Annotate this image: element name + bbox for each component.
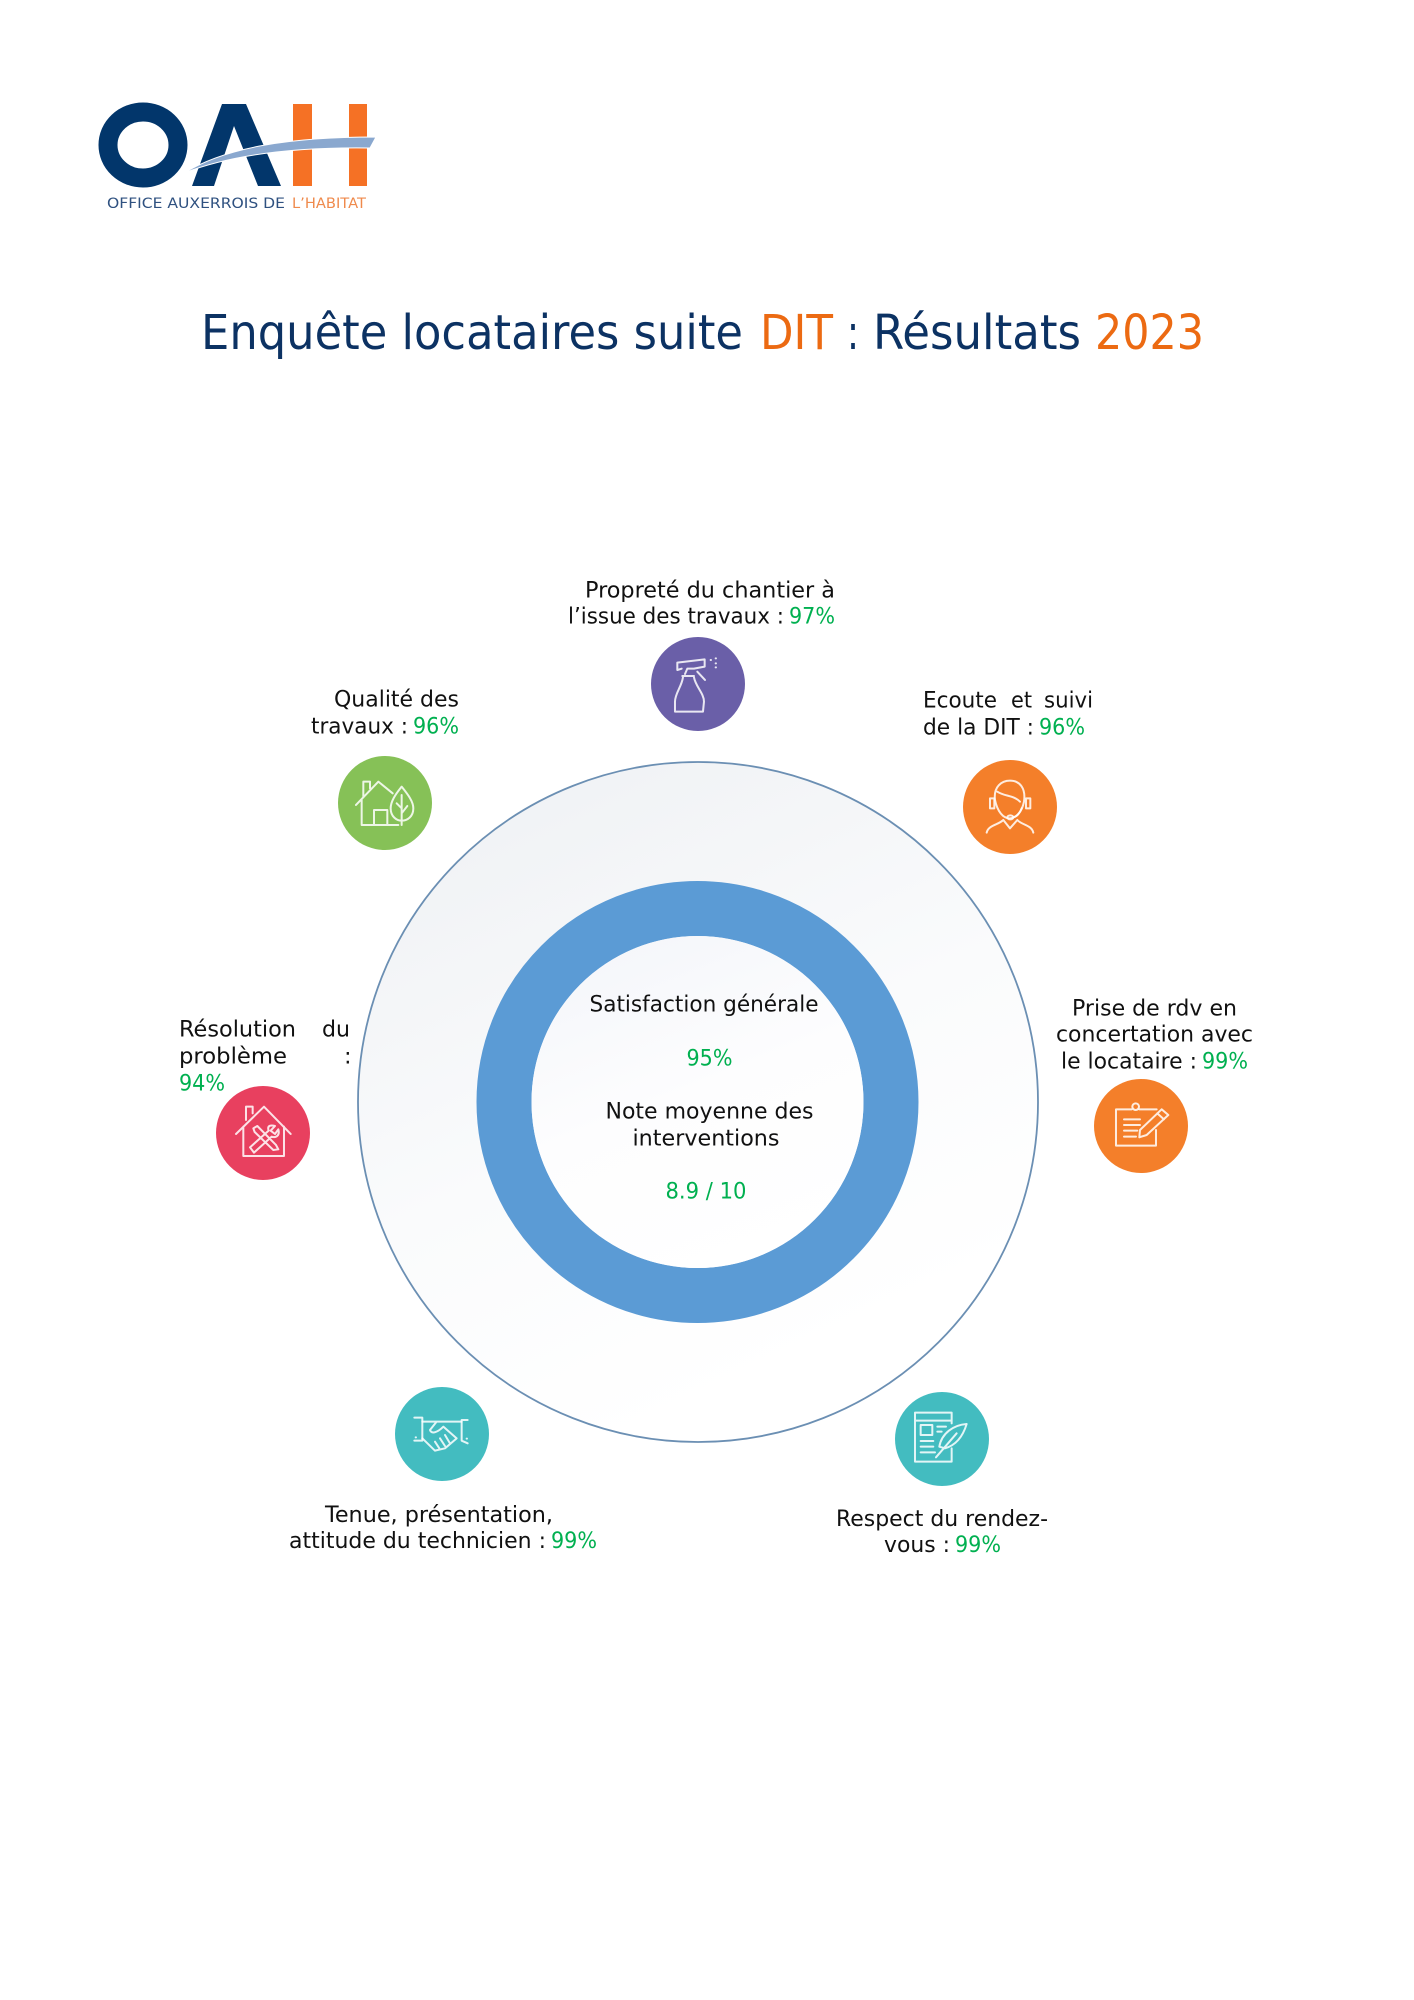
outer circle	[358, 762, 1038, 1442]
centre text: satisfaction and note: 8.9 / 10	[666, 1178, 746, 1204]
label: prise de rdv: concertation avec	[1056, 1022, 1253, 1048]
centre text: satisfaction and note: Note moyenne des	[606, 1098, 814, 1124]
title	[201, 305, 1204, 361]
label: qualité: Qualité des	[334, 686, 459, 712]
label: écoute: 96%	[1039, 714, 1085, 740]
icon: note and pencil	[1094, 1079, 1188, 1173]
title: :	[847, 305, 859, 361]
label: propreté: Propreté du chantier à	[585, 578, 835, 604]
logo tagline	[107, 196, 366, 212]
logo letter A	[192, 104, 281, 186]
title: Enquête locataires suite	[201, 305, 743, 361]
icon: spray bottle	[651, 637, 745, 731]
title: DIT	[760, 305, 834, 361]
label: résolution: Résolution	[179, 1016, 296, 1042]
label: respect: 99%	[955, 1532, 1001, 1558]
title: Résultats	[873, 305, 1081, 361]
label: propreté	[568, 578, 835, 630]
label: résolution: 94%	[179, 1070, 225, 1096]
label: qualité	[311, 686, 459, 740]
logo swoosh	[184, 137, 376, 173]
logo tagline: OFFICE AUXERROIS DE	[107, 196, 285, 212]
centre text: satisfaction and note: interventions	[632, 1126, 780, 1152]
centre text: satisfaction and note	[590, 992, 818, 1204]
label: résolution: :	[344, 1044, 352, 1070]
label: prise de rdv: le locataire :	[1061, 1048, 1197, 1074]
label: respect: vous :	[884, 1532, 950, 1558]
label: respect	[836, 1506, 1048, 1558]
label: résolution: problème	[179, 1044, 287, 1070]
label: tenue: attitude du technicien :	[289, 1528, 546, 1554]
blue ring	[504, 908, 891, 1296]
label: écoute: et	[1011, 688, 1032, 714]
icon: handshake	[395, 1387, 489, 1481]
label: prise de rdv: Prise de rdv en	[1072, 996, 1237, 1022]
label: tenue	[289, 1502, 597, 1554]
logo letter H	[293, 104, 367, 186]
label: écoute: suivi	[1044, 688, 1093, 714]
label: propreté: l’issue des travaux :	[568, 604, 784, 630]
logo tagline: L’HABITAT	[292, 196, 366, 212]
logo letter O	[108, 112, 178, 178]
label: tenue: Tenue, présentation,	[324, 1502, 553, 1528]
label: prise de rdv	[1056, 996, 1253, 1074]
icon: house and tree	[338, 756, 432, 850]
title: 2023	[1095, 305, 1204, 361]
label: tenue: 99%	[551, 1528, 597, 1554]
centre text: satisfaction and note: Satisfaction générale	[590, 992, 818, 1018]
label: résolution	[179, 1016, 352, 1096]
label: qualité: travaux :	[311, 714, 408, 740]
label: propreté: 97%	[789, 604, 835, 630]
centre text: satisfaction and note: 95%	[686, 1046, 732, 1072]
label: écoute: de la DIT :	[923, 714, 1034, 740]
inner circle	[532, 936, 864, 1268]
label: résolution: du	[322, 1016, 350, 1042]
icon: house with tools	[216, 1086, 310, 1180]
label: qualité: 96%	[413, 714, 459, 740]
label: écoute	[923, 688, 1093, 740]
label: écoute: Ecoute	[923, 688, 997, 714]
label: respect: Respect du rendez-	[836, 1506, 1048, 1532]
logo: OAH	[107, 104, 376, 212]
icon: document and quill	[895, 1392, 989, 1486]
icon: headset operator	[963, 760, 1057, 854]
label: prise de rdv: 99%	[1202, 1048, 1248, 1074]
